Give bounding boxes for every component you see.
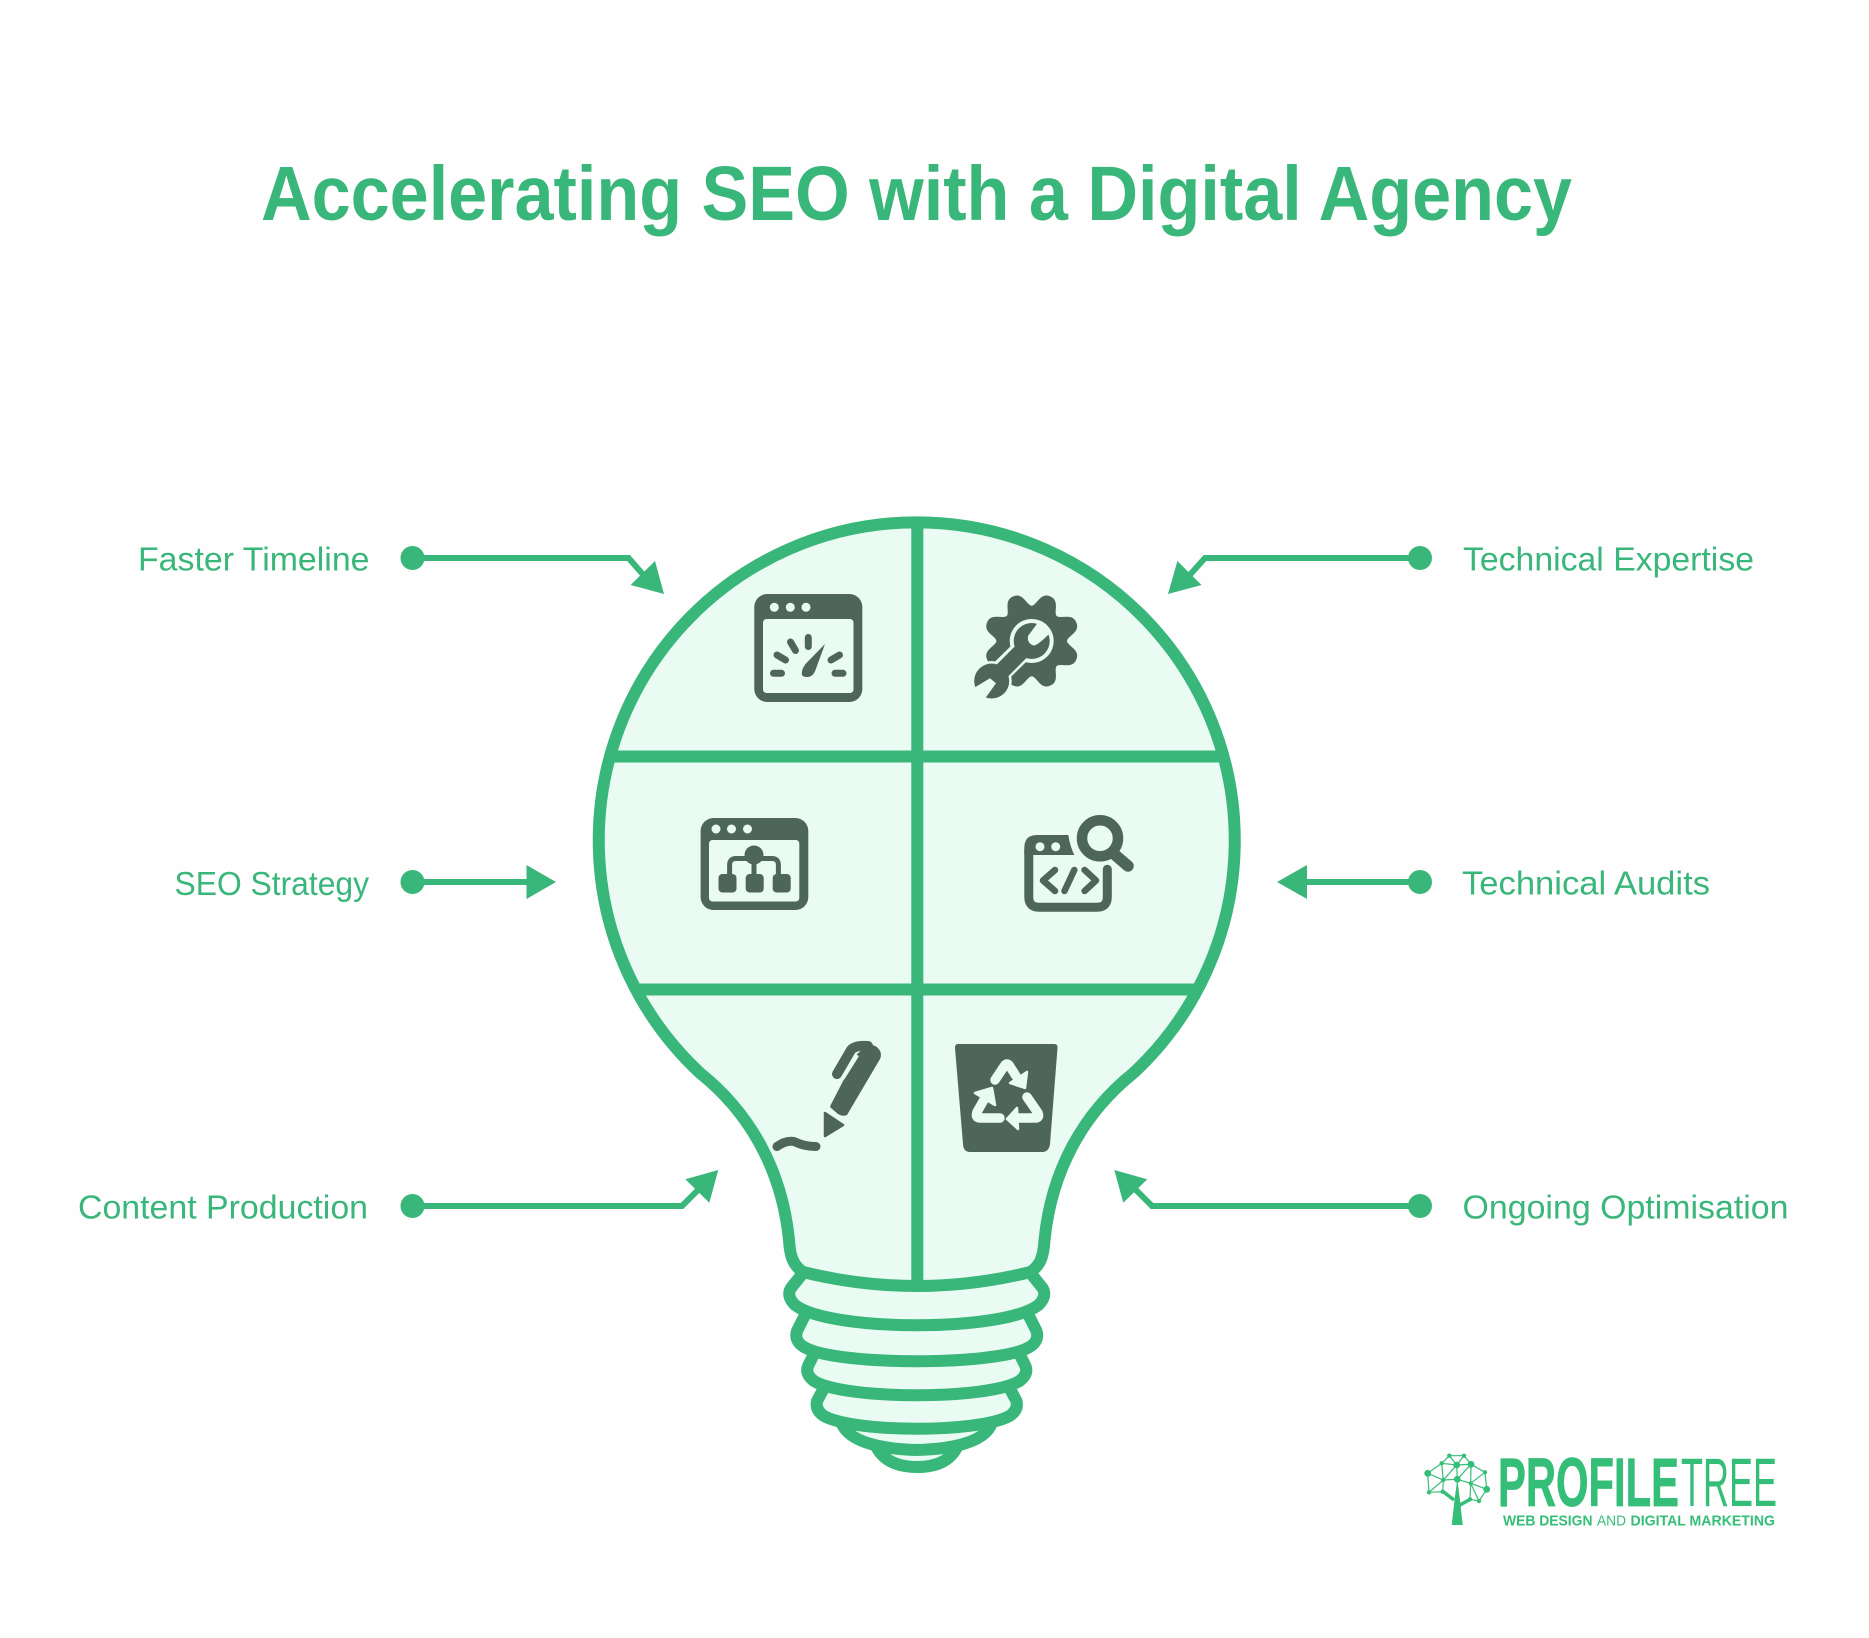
label: Content Production: Content Production	[78, 1189, 368, 1226]
arrow: Faster Timeline	[400, 546, 664, 594]
logo tagline: WEB DESIGN: WEB DESIGN	[1503, 1513, 1592, 1530]
icon: pen with squiggle	[777, 1045, 881, 1146]
arrow: SEO Strategy	[400, 865, 556, 899]
logo tagline: AND: AND	[1597, 1513, 1626, 1530]
logo: ProfileTree	[1424, 1444, 1777, 1530]
icon: gear and wrench	[966, 592, 1081, 706]
logo wordmark: PROFILE: PROFILE	[1498, 1444, 1679, 1521]
light bulb	[599, 522, 1235, 1467]
icon: site structure window	[701, 818, 808, 910]
arrow: Technical Expertise	[1168, 546, 1432, 594]
arrow: Content Production	[400, 1170, 718, 1218]
icon: recycling bin	[955, 1044, 1058, 1152]
arrow: Ongoing Optimisation	[1114, 1170, 1432, 1218]
icon: speed gauge window	[754, 594, 862, 702]
arrow: Technical Audits	[1277, 865, 1432, 899]
label: Ongoing Optimisation: Ongoing Optimisation	[1462, 1189, 1788, 1226]
label: Technical Expertise: Technical Expertise	[1463, 542, 1754, 579]
label: SEO Strategy: SEO Strategy	[174, 866, 369, 903]
label: Technical Audits: Technical Audits	[1462, 866, 1710, 902]
logo wordmark: TREE: TREE	[1681, 1444, 1777, 1521]
title: Accelerating SEO with a Digital Agency	[261, 151, 1572, 237]
logo tagline: DIGITAL MARKETING: DIGITAL MARKETING	[1630, 1513, 1775, 1530]
icon: network tree	[1424, 1454, 1490, 1525]
label: Faster Timeline: Faster Timeline	[138, 542, 370, 579]
icon: code window with magnifier	[1024, 820, 1128, 907]
